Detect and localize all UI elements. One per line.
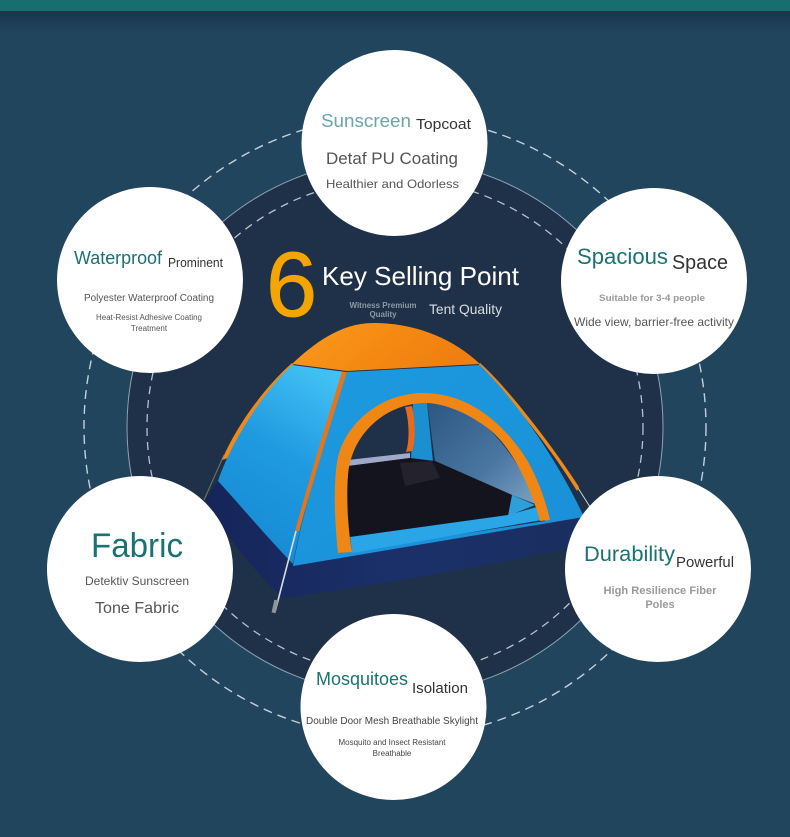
circle: durability powerful: Poles [645, 599, 675, 611]
circle: durability powerful: High Resilience Fiber [604, 585, 717, 597]
base skirt [205, 480, 585, 598]
centre pole [275, 531, 296, 612]
circle: mosquitoes isolation: Double Door Mesh Breathable Skylight [306, 715, 478, 727]
circle: durability powerful: Powerful [676, 554, 734, 571]
pole tip [272, 600, 278, 613]
circle: waterproof prominent: Prominent [168, 256, 223, 270]
circle: sunscreen topcoat: Detaf PU Coating [326, 150, 458, 168]
subtitle small [349, 301, 417, 319]
central dark disc [127, 159, 663, 695]
circle: durability powerful [565, 476, 751, 662]
left guy line [204, 455, 224, 500]
circle: waterproof prominent: Treatment [131, 324, 168, 333]
subtitle small: Witness Premium [349, 301, 417, 310]
circle: spacious space: Suitable for 3-4 people [599, 293, 705, 304]
interior blue wall [411, 402, 433, 462]
interior rear orange rim [405, 406, 415, 452]
circle: mosquitoes isolation: Mosquitoes [316, 669, 408, 689]
inner dashed ring [147, 179, 643, 675]
circle: spacious space: Wide view, barrier-free activity [574, 315, 734, 329]
subtitle tent quality: Tent Quality [429, 301, 502, 317]
right guy line [578, 488, 592, 510]
left blue panel [218, 365, 346, 564]
tent floor [348, 458, 512, 537]
corner blue patch [508, 495, 535, 516]
circle: mosquitoes isolation: Mosquito and Insect Resistant [338, 738, 446, 747]
circle: mosquitoes isolation: Breathable [373, 749, 412, 758]
circle: mosquitoes isolation: Isolation [412, 681, 468, 697]
circle: waterproof prominent [57, 187, 243, 373]
circle: spacious space: Space [672, 252, 728, 274]
circle: waterproof prominent: Heat-Resist Adhesive Coating [96, 313, 202, 322]
circle: sunscreen topcoat: Sunscreen [321, 110, 411, 131]
circle: waterproof prominent: Waterproof [74, 247, 163, 268]
circle: fabric: Tone Fabric [95, 600, 179, 617]
centre pole sleeve [295, 372, 347, 531]
circle: mosquitoes isolation [300, 614, 486, 800]
circle: sunscreen topcoat [302, 50, 488, 236]
front blue panel [293, 365, 584, 566]
door orange arch [335, 393, 550, 553]
circle: sunscreen topcoat: Topcoat [416, 117, 471, 133]
rear window sill [348, 453, 410, 466]
heading: Key Selling Point [322, 261, 520, 291]
circle: spacious space: Spacious [577, 244, 668, 269]
front door sill [350, 507, 542, 553]
circle: durability powerful: Durability [584, 543, 676, 566]
door opening sky [339, 395, 545, 553]
top shadow [0, 11, 790, 33]
orange roof [292, 323, 480, 371]
outer dashed ring [84, 116, 706, 738]
floor pillow [400, 461, 440, 486]
top teal band [0, 0, 790, 11]
title block [266, 234, 520, 336]
circle: spacious space [561, 188, 747, 374]
circle: sunscreen topcoat: Healthier and Odorless [326, 177, 459, 191]
left orange edge [222, 363, 295, 460]
big number six: 6 [266, 234, 317, 336]
right orange edge [478, 363, 579, 491]
circle: waterproof prominent: Polyester Waterproof Coating [84, 293, 214, 304]
tent illustration [204, 323, 592, 613]
circle: fabric: Detektiv Sunscreen [85, 574, 189, 588]
subtitle small: Quality [369, 310, 397, 319]
circle: fabric: Fabric [91, 527, 183, 565]
interior mesh wall [427, 400, 538, 505]
circle: fabric [47, 476, 233, 662]
